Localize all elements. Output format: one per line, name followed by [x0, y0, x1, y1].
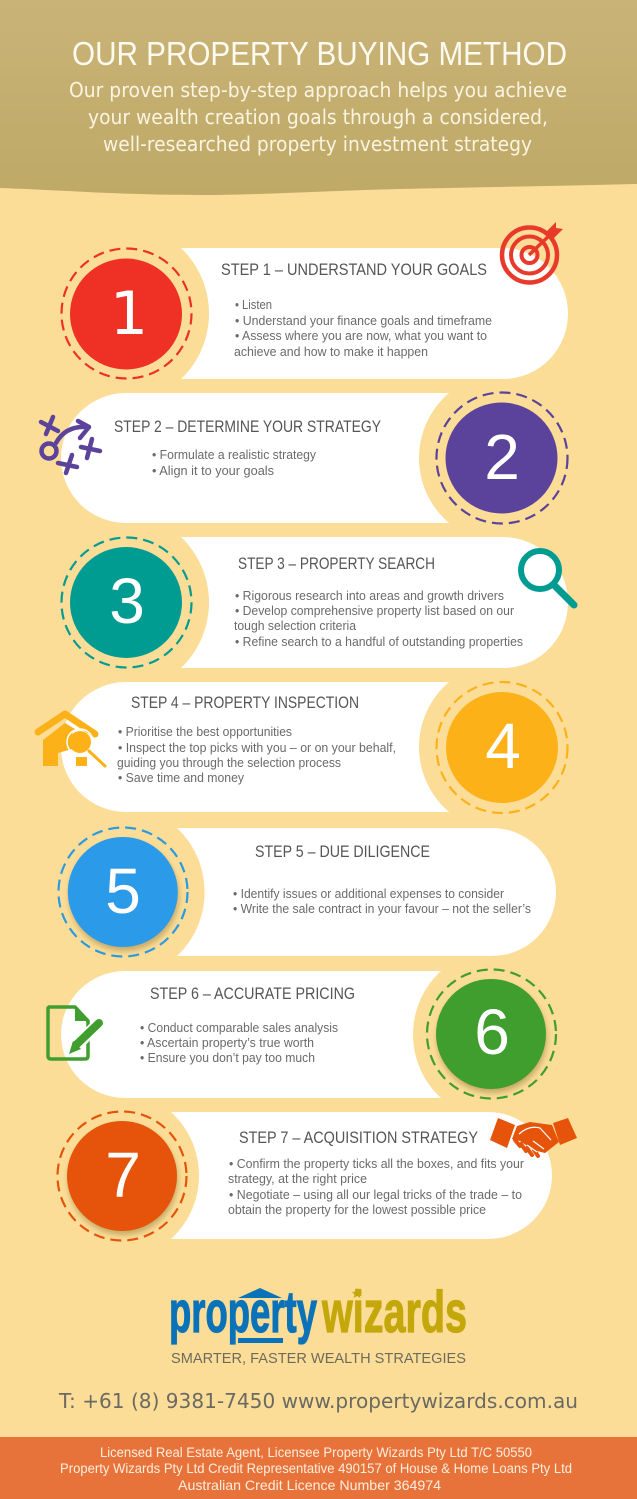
number disc 7: 7 — [105, 1139, 141, 1211]
bullets: • Formulate a realistic strategy — [152, 447, 316, 462]
licence text — [60, 1444, 572, 1493]
number disc 2 — [446, 402, 558, 514]
bullets — [233, 886, 531, 916]
bullets: strategy, at the right price — [228, 1171, 367, 1186]
bullets — [140, 1020, 338, 1065]
bullets: • Assess where you are now, what you want to — [235, 328, 487, 343]
number disc 4: 4 — [485, 710, 521, 782]
bullets: • Rigorous research into areas and growth drivers — [235, 588, 504, 603]
bullets — [117, 724, 396, 785]
number disc 1: 1 — [110, 279, 148, 349]
heading: STEP 1 – UNDERSTAND YOUR GOALS — [221, 260, 487, 279]
number disc 4 — [446, 692, 558, 803]
bullets: • Listen — [235, 297, 272, 312]
bullets: achieve and how to make it happen — [234, 344, 428, 359]
number disc 6 — [436, 979, 547, 1093]
logo roof — [238, 1288, 282, 1298]
icon: document and pencil — [48, 1007, 100, 1059]
footer band — [0, 1437, 637, 1499]
number disc 1 — [70, 258, 182, 370]
bullets: guiding you through the selection process — [117, 755, 341, 770]
subtitle — [69, 78, 567, 156]
bullets: • Ensure you don’t pay too much — [140, 1050, 315, 1065]
number disc 2: 2 — [484, 421, 520, 493]
icon: handshake — [490, 1118, 577, 1156]
icon: strategy play — [41, 417, 100, 473]
logo word: property: property — [169, 1280, 317, 1345]
panel: step 4 — [38, 682, 568, 813]
bullets: • Write the sale contract in your favour – not the seller’s — [233, 901, 531, 916]
heading: STEP 6 – ACCURATE PRICING — [150, 984, 355, 1003]
logo word: wizards: wizards — [321, 1280, 467, 1345]
bullets — [234, 297, 492, 359]
bullets: • Prioritise the best opportunities — [118, 724, 292, 739]
bullets: • Identify issues or additional expenses to consider — [233, 886, 505, 901]
contact details: T: +61 (8) 9381-7450 www.propertywizards.com.au — [58, 1389, 578, 1413]
heading: STEP 3 – PROPERTY SEARCH — [238, 554, 435, 573]
panel: step 6 — [48, 970, 556, 1098]
panel: step 3 — [62, 537, 574, 668]
bullets: • Refine search to a handful of outstanding properties — [235, 634, 523, 649]
header banner — [0, 0, 637, 195]
bullets: obtain the property for the lowest possible price — [228, 1202, 486, 1217]
bullets — [228, 1156, 525, 1217]
number disc 3 — [70, 547, 182, 658]
tagline: SMARTER, FASTER WEALTH STRATEGIES — [171, 1350, 466, 1367]
icon: house inspection — [38, 714, 105, 766]
bullets: • Understand your finance goals and timeframe — [235, 313, 492, 328]
heading: STEP 5 – DUE DILIGENCE — [255, 842, 430, 861]
bullets: • Confirm the property ticks all the boxes, and fits your — [229, 1156, 525, 1171]
panel: step 7 — [58, 1112, 577, 1240]
bullets: • Negotiate – using all our legal tricks of the trade – to — [229, 1187, 522, 1202]
panel: step 1 — [62, 222, 568, 379]
panel: step 5 — [58, 828, 556, 956]
title: OUR PROPERTY BUYING METHOD — [72, 35, 567, 72]
heading: STEP 2 – DETERMINE YOUR STRATEGY — [114, 417, 381, 436]
number disc 6: 6 — [474, 996, 510, 1068]
bullets: • Align it to your goals — [152, 463, 274, 478]
panel: step 2 — [41, 392, 568, 524]
licence text: Australian Credit Licence Number 364974 — [178, 1477, 441, 1493]
icon: target — [502, 222, 563, 282]
licence text: Licensed Real Estate Agent, Licensee Property Wizards Pty Ltd T/C 50550 — [100, 1444, 532, 1460]
bullets: • Ascertain property’s true worth — [140, 1035, 314, 1050]
bullets: • Save time and money — [118, 770, 244, 785]
bullets: • Conduct comparable sales analysis — [140, 1020, 338, 1035]
licence text: Property Wizards Pty Ltd Credit Representative 490157 of House & Home Loans Pty Ltd — [60, 1460, 572, 1476]
subtitle: your wealth creation goals through a considered, — [88, 105, 548, 129]
logo: property wizards — [169, 1280, 467, 1345]
logo star — [352, 1288, 362, 1298]
bullets: • Develop comprehensive property list based on our — [235, 603, 515, 618]
subtitle: well-researched property investment strategy — [103, 132, 532, 156]
bullets: tough selection criteria — [234, 618, 357, 633]
number disc 7 — [67, 1121, 178, 1235]
icon: magnifying glass — [521, 551, 574, 605]
number disc 5: 5 — [105, 855, 141, 927]
bullets: • Inspect the top picks with you – or on your behalf, — [118, 740, 396, 755]
heading: STEP 7 – ACQUISITION STRATEGY — [239, 1128, 478, 1147]
bullets — [152, 447, 316, 478]
heading: STEP 4 – PROPERTY INSPECTION — [131, 693, 359, 712]
number disc 3: 3 — [109, 565, 145, 637]
number disc 5 — [68, 837, 179, 951]
subtitle: Our proven step-by-step approach helps you achieve — [69, 78, 567, 102]
bullets — [234, 588, 523, 649]
